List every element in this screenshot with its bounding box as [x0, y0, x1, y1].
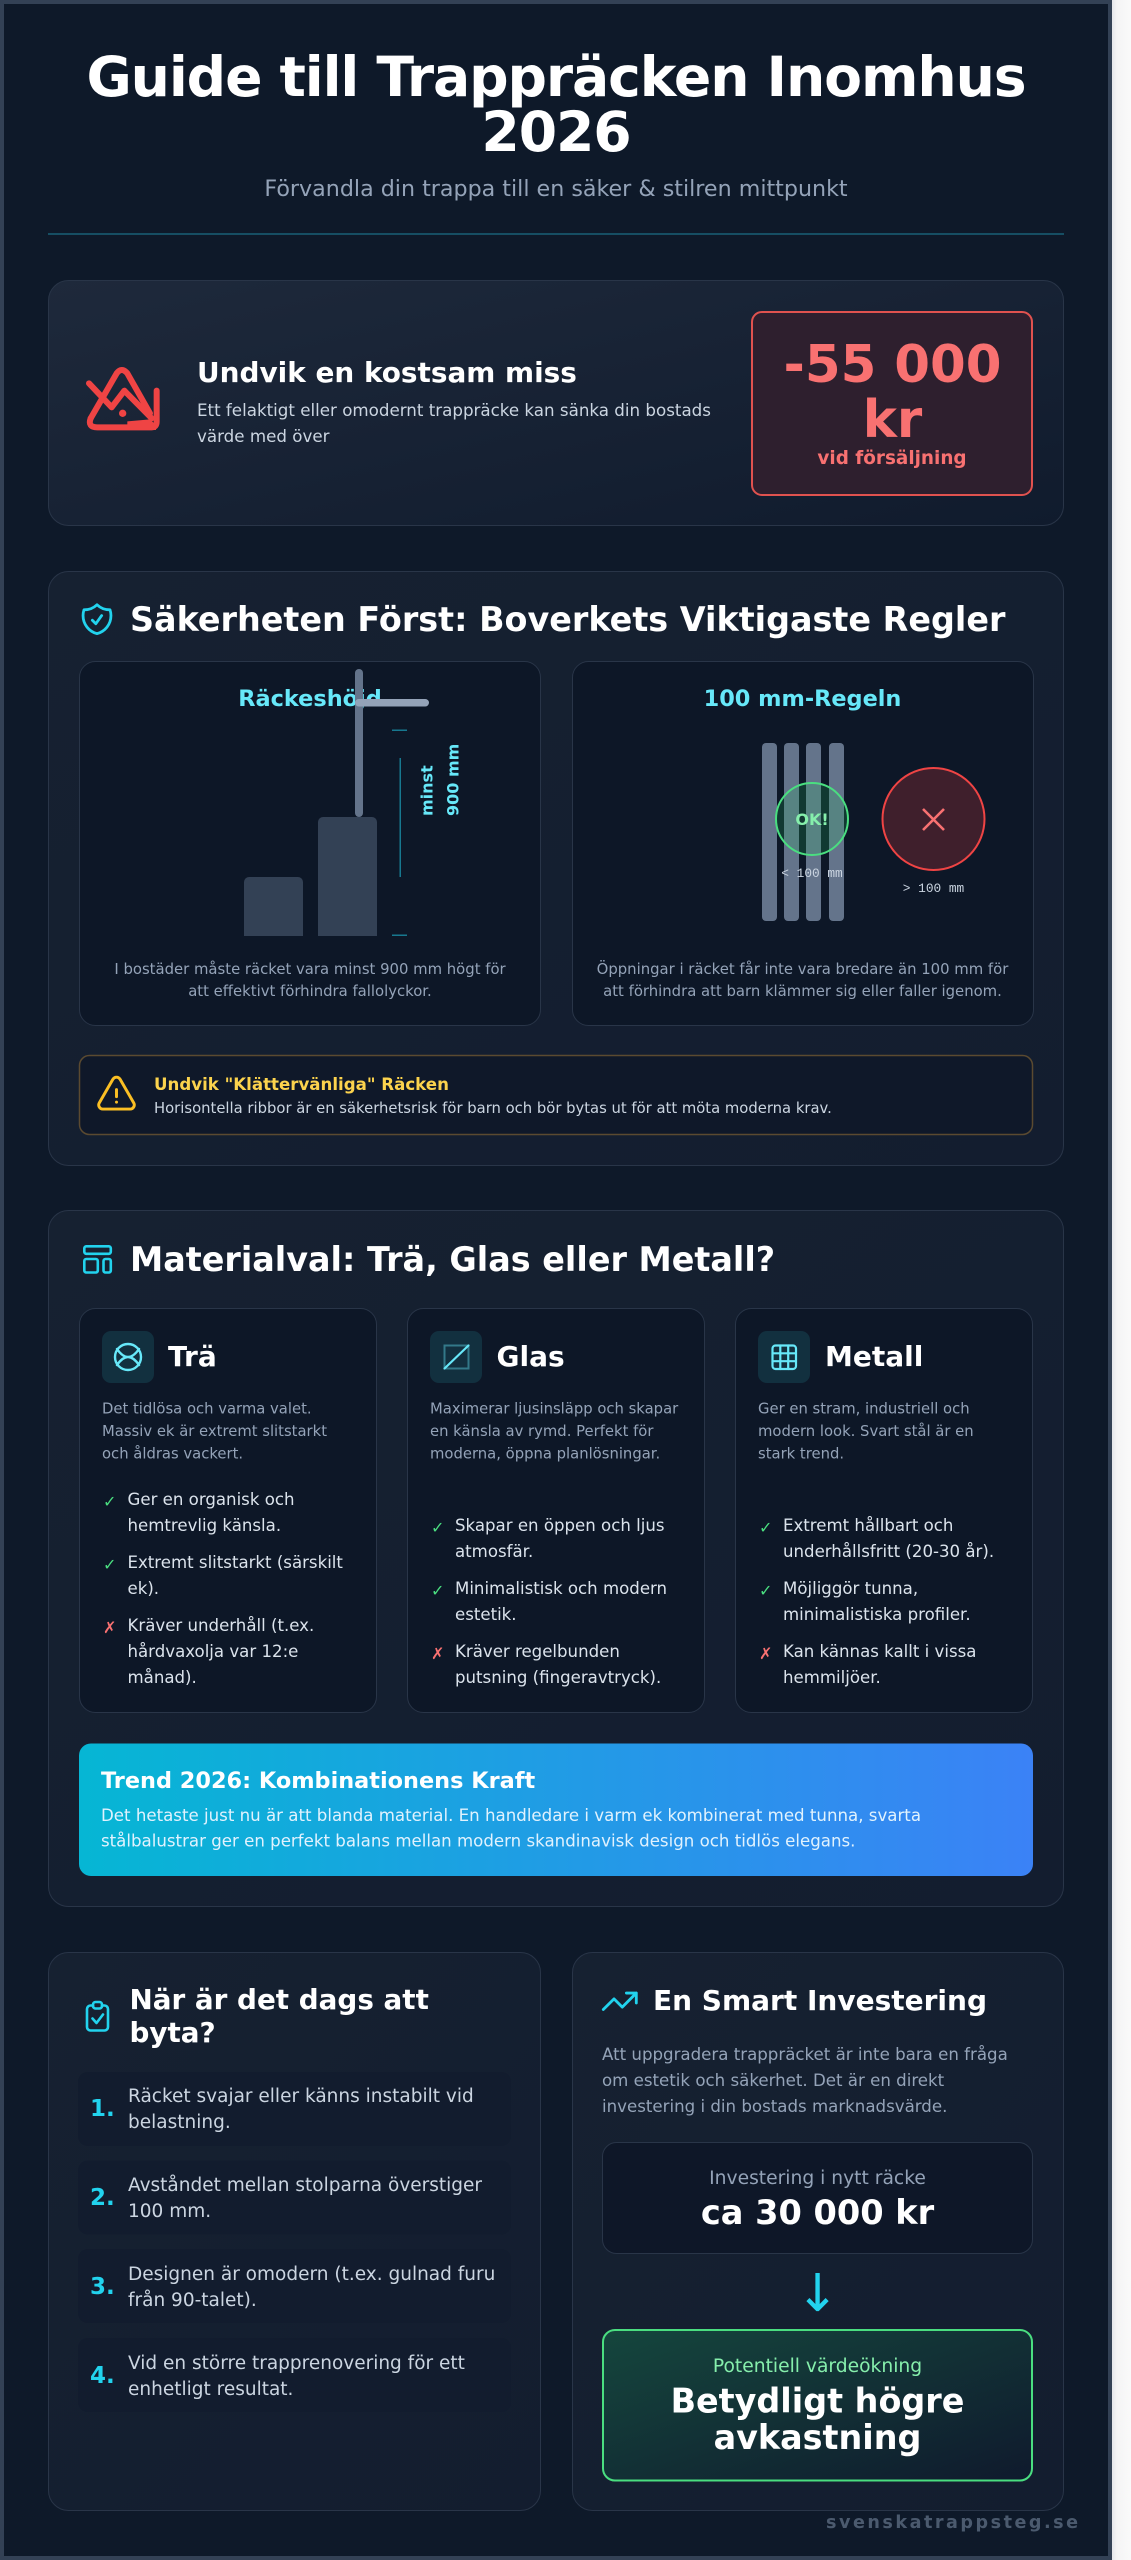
pros and cons: wood: hårdvaxolja var 12:e: [128, 1642, 298, 1661]
callout: value loss: vid försäljning: [817, 448, 967, 469]
diagram: stair and 900 mm railing: 900 mm: [444, 744, 463, 816]
text: warning description: Ett felaktigt eller omodernt trappräcke kan sänka din bostads: [197, 400, 711, 420]
callout: value loss: kr: [863, 390, 923, 450]
pros and cons: wood: ✓: [103, 1555, 116, 1574]
pros and cons: glass: Minimalistisk och modern: [455, 1579, 667, 1598]
list item 4: enhetligt resultat.: [128, 2379, 293, 2400]
box: investment cost: [602, 2142, 1032, 2254]
heading: materials: Materialval: Trä, Glas eller Metall?: [130, 1240, 775, 1279]
icon: clipboard check: [87, 2002, 108, 2030]
pros and cons: wood: månad).: [128, 1668, 197, 1687]
header: title and subtitle: [86, 46, 1026, 202]
list item 1: [78, 2072, 511, 2146]
pros and cons: glass: Kräver regelbunden: [455, 1642, 620, 1661]
pros and cons: wood: ✗: [103, 1618, 116, 1637]
text: warning description: värde med över: [197, 426, 330, 446]
name: metal: Metall: [825, 1340, 923, 1373]
panel: smart investment: [572, 1952, 1064, 2510]
diagram: stair and 900 mm railing: [244, 669, 463, 936]
panel: safety rules: [48, 572, 1064, 1166]
pros and cons: metal: ✓: [759, 1518, 772, 1537]
name: wood: Trä: [168, 1340, 217, 1373]
name: glass: Glas: [496, 1340, 565, 1373]
box: value increase: avkastning: [714, 2418, 921, 2457]
callout: climb-friendly railings: [80, 1056, 1032, 1134]
heading: smart investment: En Smart Investering: [653, 1984, 987, 2017]
title: Guide till Trappräcken Inomhus: [86, 46, 1026, 110]
list item 1: Räcket svajar eller känns instabilt vid: [128, 2086, 474, 2107]
pros and cons: metal: Möjliggör tunna,: [783, 1579, 918, 1598]
panel: costly mistake: [48, 280, 1064, 526]
list item 1: belastning.: [128, 2112, 231, 2133]
description: wood: Det tidlösa och varma valet.: [102, 1400, 312, 1418]
icon: layout: [84, 1246, 111, 1272]
callout: trend 2026: Det hetaste just nu är att blanda material. En handledare i varm ek kombinerat med tunna, svarta: [101, 1806, 921, 1825]
icon: shield check: [83, 605, 111, 634]
pros and cons: glass: ✗: [431, 1644, 444, 1663]
box: value increase: [603, 2330, 1032, 2480]
pros and cons: wood: Ger en organisk och: [128, 1490, 294, 1509]
pros and cons: glass: ✓: [431, 1518, 444, 1537]
pros and cons: wood: ✓: [103, 1492, 116, 1511]
description: glass: moderna, öppna planlösningar.: [430, 1446, 660, 1462]
callout: value loss: [752, 312, 1032, 495]
pros and cons: metal: hemmiljöer.: [783, 1668, 881, 1687]
list item 3: [78, 2249, 511, 2323]
list item 2: [78, 2160, 511, 2234]
icon: falling value: [89, 370, 157, 430]
panel: material choice: [48, 1210, 1064, 1906]
icon: trending up: [603, 1993, 636, 2010]
pros and cons: metal: [759, 1516, 994, 1687]
list item 4: 4.: [90, 2363, 115, 2389]
pros and cons: metal: minimalistiska profiler.: [783, 1605, 971, 1624]
heading: when to replace: När är det dags att: [130, 1983, 429, 2016]
description: wood: och åldras vackert.: [102, 1446, 243, 1462]
pros and cons: metal: Extremt hållbart och: [783, 1516, 953, 1535]
description: metal: stark trend.: [758, 1446, 844, 1462]
icon: glass: [430, 1331, 482, 1383]
heading: 100 mm rule: 100 mm-Regeln: [704, 686, 901, 712]
pros and cons: glass: estetik.: [455, 1605, 517, 1624]
pros and cons: wood: Extremt slitstarkt (särskilt: [128, 1553, 343, 1572]
caption: railing height: att effektivt förhindra fallolyckor.: [188, 982, 432, 1000]
text: investment description: investering i din bostads marknadsvärde.: [602, 2097, 947, 2116]
diagram: balusters with sphere test: [762, 743, 984, 921]
pros and cons: glass: [431, 1516, 667, 1687]
card: 100 mm rule: [572, 662, 1034, 1026]
pros and cons: metal: Kan kännas kallt i vissa: [783, 1642, 976, 1661]
heading: when to replace: byta?: [130, 2016, 216, 2049]
description: metal: modern look. Svart stål är en: [758, 1423, 974, 1440]
pros and cons: wood: ek).: [128, 1579, 159, 1598]
heading: safety first: Säkerheten Först: Boverkets Viktigaste Regler: [130, 600, 1006, 639]
box: investment cost: Investering i nytt räcke: [709, 2168, 926, 2189]
callout: trend 2026: Trend 2026: Kombinationens Kraft: [101, 1768, 535, 1794]
warning text: Horisontella ribbor är en säkerhetsrisk för barn och bör bytas ut för att möta moderna krav.: [154, 1100, 832, 1117]
callout: trend 2026: stålbalustrar ger en perfekt balans mellan modern skandinavisk design och tidlös elegans.: [101, 1832, 855, 1850]
footer: site name: svenskatrappsteg.se: [826, 2513, 1081, 2533]
diagram: balusters with sphere test: > 100 mm: [903, 881, 965, 896]
subtitle: Förvandla din trappa till en säker & stilren mittpunkt: [264, 176, 848, 202]
box: value increase: Potentiell värdeökning: [713, 2356, 922, 2377]
pros and cons: metal: ✗: [759, 1644, 772, 1663]
list item 1: 1.: [90, 2096, 115, 2122]
caption: 100 mm rule: att förhindra att barn klämmer sig eller faller igenom.: [603, 982, 1002, 1000]
arrow: down: ↓: [796, 2264, 839, 2324]
card: railing height: [80, 662, 540, 1026]
pros and cons: glass: putsning (fingeravtryck).: [455, 1668, 661, 1687]
pros and cons: metal: underhållsfritt (20-30 år).: [783, 1542, 994, 1561]
warning title: Undvik "Klättervänliga" Räcken: [154, 1075, 449, 1094]
list item 3: från 90-talet).: [128, 2290, 257, 2311]
description: wood: Massiv ek är extremt slitstarkt: [102, 1423, 327, 1440]
box: investment cost: ca 30 000 kr: [701, 2193, 935, 2232]
diagram: stair and 900 mm railing: minst: [418, 765, 437, 816]
list item 2: Avståndet mellan stolparna överstiger: [128, 2175, 482, 2196]
list item 2: 100 mm.: [128, 2201, 211, 2222]
list item 4: [78, 2338, 511, 2412]
list item 2: 2.: [90, 2185, 115, 2211]
description: metal: Ger en stram, industriell och: [758, 1400, 970, 1418]
text: investment description: om estetik och säkerhet. Det är en direkt: [602, 2071, 945, 2090]
pros and cons: wood: [103, 1490, 343, 1687]
title: 2026: [481, 101, 631, 165]
callout: value loss: -55 000: [783, 335, 1002, 395]
panel: when to replace: [48, 1952, 540, 2510]
pros and cons: glass: Skapar en öppen och ljus: [455, 1516, 664, 1535]
heading: avoid a costly miss: Undvik en kostsam miss: [197, 356, 577, 389]
pros and cons: glass: ✓: [431, 1581, 444, 1600]
list item 4: Vid en större trapprenovering för ett: [128, 2353, 465, 2374]
diagram: balusters with sphere test: < 100 mm: [781, 866, 843, 881]
description: glass: Maximerar ljusinsläpp och skapar: [430, 1400, 678, 1418]
diagram: balusters with sphere test: OK!: [795, 810, 829, 829]
callout: trend 2026: [79, 1744, 1033, 1876]
card: metal: [736, 1308, 1032, 1712]
caption: railing height: I bostäder måste räcket vara minst 900 mm högt för: [114, 960, 506, 978]
icon: wood: [102, 1331, 154, 1383]
card: wood: [80, 1308, 376, 1712]
card: glass: [408, 1308, 704, 1712]
pros and cons: wood: hemtrevlig känsla.: [128, 1516, 281, 1535]
list item 3: 3.: [90, 2274, 115, 2300]
pros and cons: wood: Kräver underhåll (t.ex.: [128, 1616, 314, 1635]
icon: warning triangle: [99, 1077, 134, 1109]
caption: 100 mm rule: Öppningar i räcket får inte vara bredare än 100 mm för: [597, 960, 1008, 978]
heading: railing height: Räckeshöjd: [238, 686, 382, 712]
pros and cons: metal: ✓: [759, 1581, 772, 1600]
description: glass: en känsla av rymd. Perfekt för: [430, 1423, 654, 1440]
icon: metal: [758, 1331, 810, 1383]
list item 3: Designen är omodern (t.ex. gulnad furu: [128, 2264, 495, 2285]
box: value increase: Betydligt högre: [671, 2382, 964, 2420]
text: investment description: Att uppgradera trappräcket är inte bara en fråga: [602, 2045, 1008, 2064]
pros and cons: glass: atmosfär.: [455, 1542, 533, 1561]
